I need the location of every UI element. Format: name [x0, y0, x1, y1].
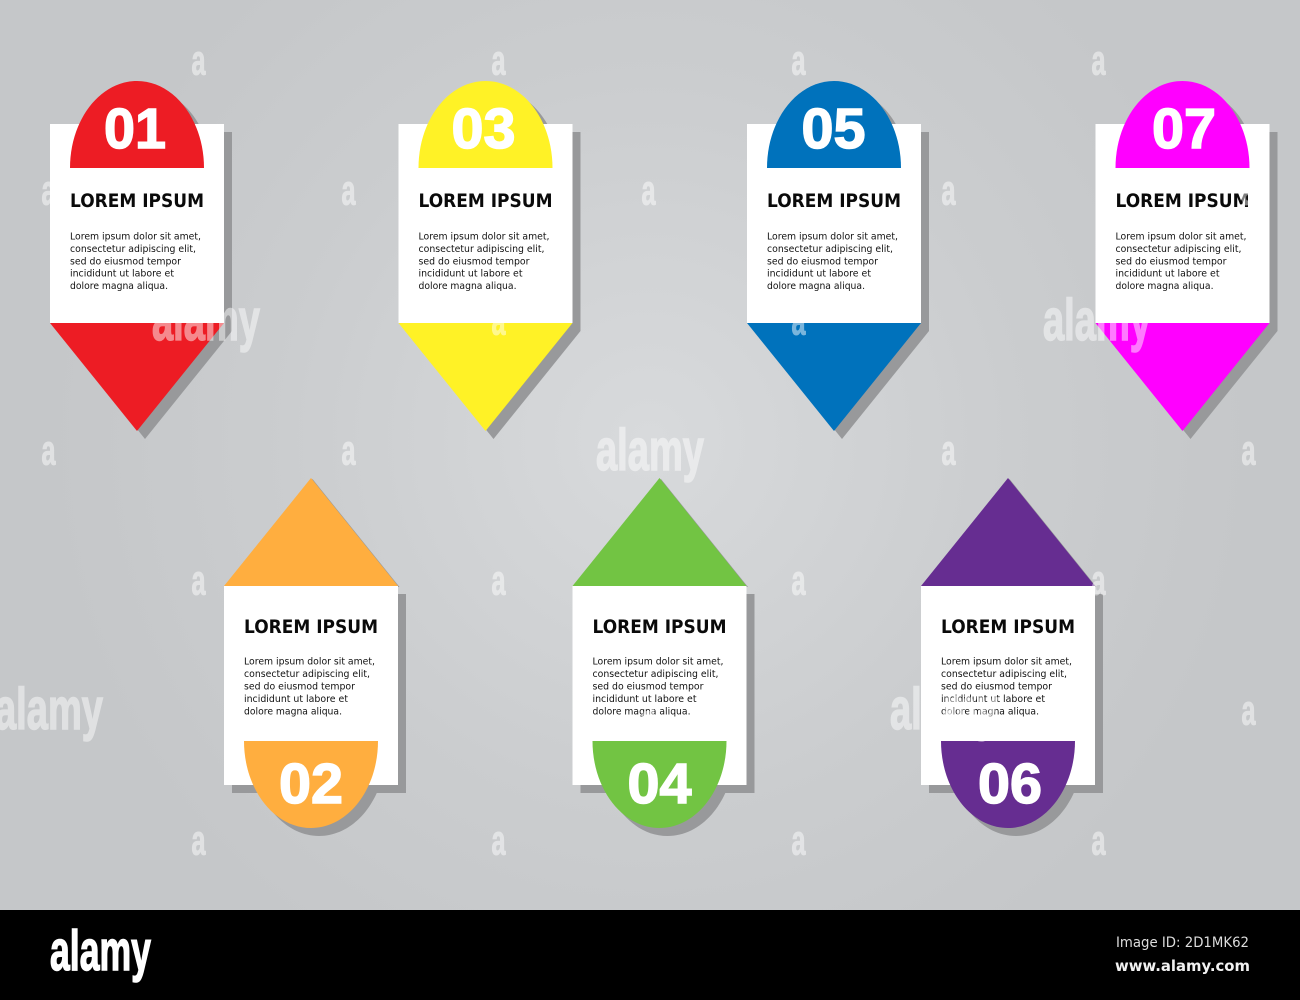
- panel: step 05: consectetur adipiscing elit,: [767, 244, 893, 255]
- panel: step 04: consectetur adipiscing elit,: [592, 669, 718, 680]
- panel: step 01: consectetur adipiscing elit,: [70, 244, 196, 255]
- footer logo: alamy: [50, 919, 151, 983]
- panel: step 04: [572, 478, 754, 836]
- panel: step 04: LOREM IPSUM: [592, 616, 726, 638]
- watermarks: a: [942, 686, 956, 734]
- watermarks: a: [792, 36, 806, 84]
- watermarks: a: [192, 816, 206, 864]
- panel: step 05: 05: [802, 97, 866, 161]
- panel: step 07: [1096, 81, 1278, 439]
- footer bar: [0, 910, 1300, 1000]
- panel: step 01: dolore magna aliqua.: [70, 281, 168, 292]
- watermarks: a: [942, 426, 956, 474]
- panel: step 07: consectetur adipiscing elit,: [1116, 244, 1242, 255]
- watermarks: a: [342, 166, 356, 214]
- panel: step 07: 07: [1152, 97, 1216, 161]
- panel: step 03: 03: [452, 97, 516, 161]
- panel: step 04: sed do eiusmod tempor: [592, 682, 704, 692]
- panel: step 04: Lorem ipsum dolor sit amet,: [592, 656, 724, 668]
- watermarks: a: [1092, 816, 1106, 864]
- panel: step 05: [747, 81, 929, 439]
- panel: step 06: consectetur adipiscing elit,: [941, 669, 1067, 680]
- panel: step 06: [921, 478, 1103, 836]
- watermarks: a: [492, 296, 506, 344]
- watermarks: a: [42, 426, 56, 474]
- panel: step 02: sed do eiusmod tempor: [244, 682, 356, 692]
- panel: step 07: LOREM IPSUM: [1116, 190, 1250, 212]
- panel: step 04: dolore magna aliqua.: [592, 706, 690, 718]
- watermarks: [0, 36, 1256, 864]
- watermarks: a: [192, 556, 206, 604]
- panel: step 03: consectetur adipiscing elit,: [418, 244, 544, 255]
- watermarks: a: [192, 36, 206, 84]
- panel: step 01: sed do eiusmod tempor: [70, 256, 182, 268]
- panel: step 03: incididunt ut labore et: [418, 268, 523, 280]
- panel: step 03: LOREM IPSUM: [418, 190, 552, 212]
- panel: step 01: 01: [104, 97, 166, 161]
- watermarks: alamy: [596, 418, 704, 483]
- watermarks: alamy: [1043, 288, 1151, 353]
- panel: step 02: Lorem ipsum dolor sit amet,: [244, 656, 375, 668]
- panel: step 02: consectetur adipiscing elit,: [244, 669, 370, 680]
- panel: step 02: 02: [279, 752, 343, 816]
- panel: step 01: LOREM IPSUM: [70, 190, 204, 212]
- watermarks: a: [342, 426, 356, 474]
- panel: step 07: incididunt ut labore et: [1116, 268, 1220, 280]
- watermarks: a: [492, 36, 506, 84]
- panel: step 02: dolore magna aliqua.: [244, 706, 342, 718]
- panel: step 01: Lorem ipsum dolor sit amet,: [70, 232, 201, 242]
- panel: step 06: Lorem ipsum dolor sit amet,: [941, 656, 1072, 668]
- watermarks: a: [642, 166, 656, 214]
- panel: step 06: 06: [978, 752, 1042, 816]
- watermarks: a: [792, 816, 806, 864]
- panel: step 06: dolore magna aliqua.: [941, 706, 1039, 718]
- panel: step 05: Lorem ipsum dolor sit amet,: [767, 232, 898, 242]
- panel: step 07: dolore magna aliqua.: [1116, 281, 1214, 292]
- panel: step 02: LOREM IPSUM: [244, 616, 378, 638]
- panel: step 06: sed do eiusmod tempor: [941, 682, 1053, 692]
- watermarks: a: [1242, 426, 1256, 474]
- watermarks: a: [42, 166, 56, 214]
- panel: step 03: sed do eiusmod tempor: [418, 256, 530, 268]
- watermarks: a: [1242, 686, 1256, 734]
- watermarks: a: [1242, 166, 1256, 214]
- panel: step 05: incididunt ut labore et: [767, 268, 871, 280]
- panel: step 01: [50, 81, 232, 439]
- panel: step 07: Lorem ipsum dolor sit amet,: [1116, 232, 1246, 242]
- panel: step 02: [224, 478, 406, 836]
- watermarks: alamy: [152, 288, 260, 353]
- panel: step 06: LOREM IPSUM: [941, 616, 1075, 638]
- watermarks: a: [1092, 556, 1106, 604]
- watermarks: a: [792, 556, 806, 604]
- panel: step 05: LOREM IPSUM: [767, 190, 901, 212]
- panel: step 04: incididunt ut labore et: [592, 694, 697, 705]
- panel: step 04: 04: [628, 752, 692, 816]
- watermarks: a: [792, 296, 806, 344]
- watermarks: a: [1092, 36, 1106, 84]
- watermarks: a: [492, 816, 506, 864]
- panel: step 03: dolore magna aliqua.: [418, 281, 516, 292]
- panel: step 05: sed do eiusmod tempor: [767, 256, 879, 268]
- website: www.alamy.com: [1115, 957, 1250, 975]
- watermarks: a: [492, 556, 506, 604]
- watermarks: alamy: [890, 677, 998, 742]
- panel: step 02: incididunt ut labore et: [244, 694, 348, 705]
- panel: step 01: incididunt ut labore et: [70, 268, 174, 280]
- watermarks: a: [642, 686, 656, 734]
- panel: step 03: [398, 81, 580, 439]
- panel: step 03: Lorem ipsum dolor sit amet,: [418, 232, 550, 242]
- watermarks: a: [342, 686, 356, 734]
- watermarks: a: [942, 166, 956, 214]
- panel: step 05: dolore magna aliqua.: [767, 281, 865, 292]
- image id: Image ID: 2D1MK62: [1116, 935, 1249, 951]
- panel: step 06: incididunt ut labore et: [941, 694, 1045, 705]
- panel: step 07: sed do eiusmod tempor: [1116, 256, 1227, 268]
